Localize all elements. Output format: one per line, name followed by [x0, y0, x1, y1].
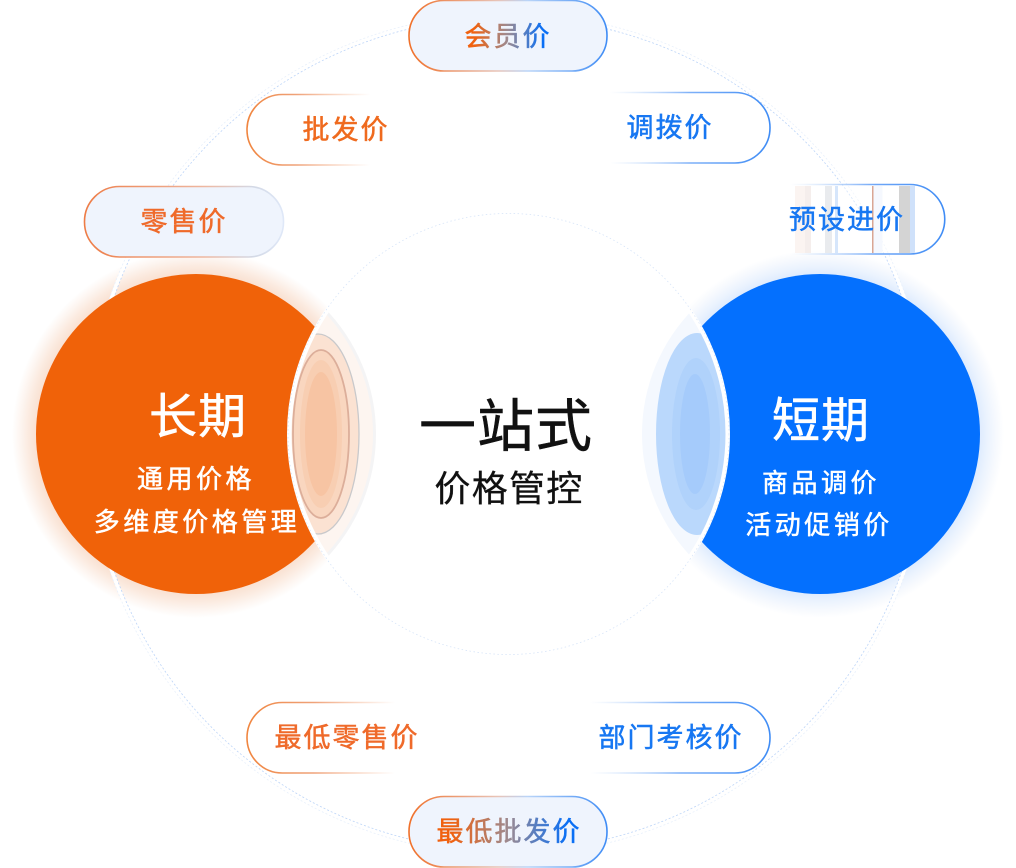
- pill: 最低零售价: 最低零售价: [274, 723, 420, 753]
- pill: 会员价: 会员价: [464, 22, 552, 52]
- right circle glow: [636, 250, 1004, 618]
- left circle text: 长期: [149, 391, 247, 444]
- pill: 部门考核价: 部门考核价: [598, 723, 744, 753]
- pill: 零售价: [84, 186, 284, 257]
- panel: right circle: [660, 274, 980, 594]
- pill: 会员价: [409, 0, 607, 71]
- right circle text: 商品调价: [762, 468, 880, 498]
- right circle text: 活动促销价: [745, 510, 893, 540]
- left overlap lens: [292, 312, 376, 556]
- pill: 预设进价: 预设进价: [789, 205, 905, 235]
- left circle glow: [12, 250, 380, 618]
- panel: centre circle: [288, 214, 729, 654]
- pill: 调拨价: 调拨价: [626, 113, 714, 143]
- pill: 调拨价: [610, 92, 770, 163]
- right overlap lens: [642, 314, 726, 554]
- pill: 批发价: [247, 94, 390, 165]
- right circle text: 短期: [772, 395, 870, 448]
- pill: 最低批发价: 最低批发价: [436, 817, 582, 847]
- pill: 部门考核价: [590, 702, 770, 773]
- pill: 零售价: 零售价: [140, 207, 228, 237]
- centre title: 一站式: [419, 395, 593, 459]
- pill: 最低批发价: [409, 796, 607, 867]
- centre title: 价格管控: [434, 468, 584, 509]
- pill: 最低零售价: [247, 702, 420, 773]
- centre circle edge: [290, 216, 727, 652]
- panel: left circle: [36, 274, 356, 594]
- pill: 预设进价: [789, 184, 945, 254]
- left circle text: 多维度价格管理: [94, 507, 300, 537]
- centre title: [419, 395, 593, 509]
- pill: 批发价: 批发价: [302, 115, 390, 145]
- left circle text: 通用价格: [137, 464, 255, 494]
- left circle text: [94, 391, 300, 537]
- right circle text: [745, 395, 893, 540]
